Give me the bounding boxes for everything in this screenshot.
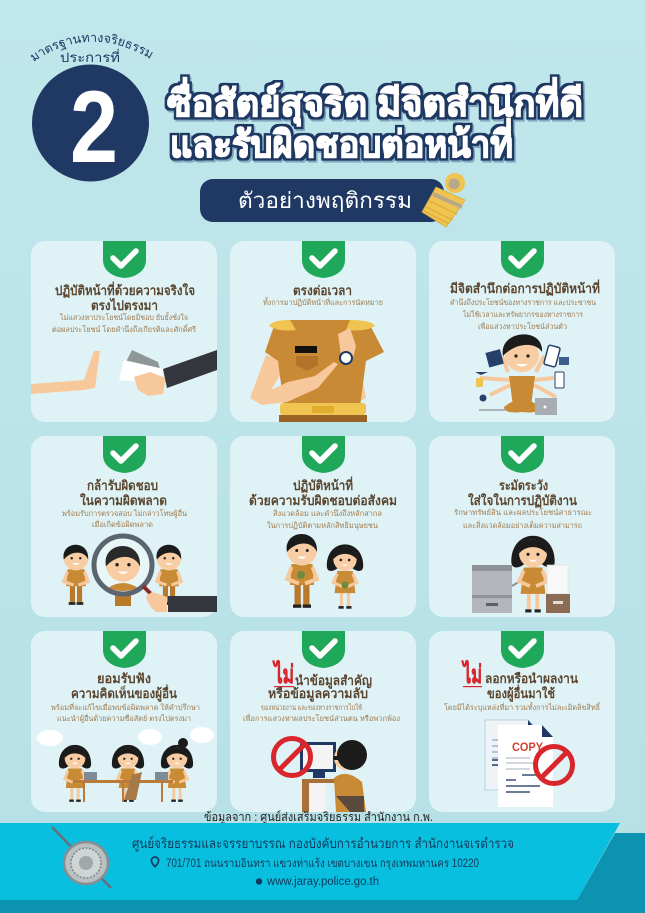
panel: confidential data: [230, 631, 416, 812]
description: รักษาทรัพย์สิน และผลประโยชน์สาธารณะ: [454, 508, 592, 517]
main title: ซื่อสัตย์สุจริต มีจิตสำนึกที่ดี: [167, 77, 583, 127]
description line 2: แนะนำผู้อื่นด้วยความซื่อสัตย์ ตรงไปตรงมา: [57, 713, 191, 723]
icon: check shield: [501, 436, 544, 473]
footer dark band: [0, 833, 645, 913]
illustration: magnifier on officers: [63, 536, 217, 612]
footer band: [0, 823, 620, 900]
description line 2: ต่อผลประโยชน์ โดยคำนึงถึงเกียรติและศักดิ์ศรี: [52, 324, 196, 334]
illustration: officer at secret screen: [274, 738, 367, 812]
icon: check shield: [302, 436, 345, 473]
panel: conscience: [429, 241, 615, 422]
heading line 2: ความคิดเห็นของผู้อื่น: [71, 684, 177, 702]
illustration: two officers with plant: [287, 534, 363, 609]
description line 2: และสิ่งแวดล้อมอย่างเต็มความสามารถ: [463, 520, 582, 530]
illustration: copied documents: COPY: [512, 740, 543, 754]
description: โดยมิได้ระบุแหล่งที่มา รวมทั้งการไม่ละเมิดลิขสิทธิ์: [444, 702, 601, 712]
panel: accept mistakes: [31, 436, 217, 617]
icon: check shield: [103, 241, 146, 278]
heading: ลอกหรือนำผลงาน: [485, 671, 578, 686]
illustration: meeting at table: [37, 727, 214, 802]
heading line 2: ด้วยความรับผิดชอบต่อสังคม: [249, 493, 397, 508]
description: คำนึงถึงประโยชน์ของทางราชการ และประชาชน: [450, 298, 596, 307]
description: ของหน่วยงาน และของทางราชการไปใช้: [261, 703, 362, 712]
heading line 2: ของผู้อื่นมาใช้: [487, 684, 555, 702]
illustration: officer checking watch: [250, 320, 384, 422]
description: ทั้งการมาปฏิบัติหน้าที่และการนัดหมาย: [263, 297, 383, 307]
description line 2: เมื่อเกิดข้อผิดพลาด: [92, 519, 153, 529]
police emblem: [52, 827, 111, 888]
description: พร้อมที่จะแก้ไขเมื่อพบข้อผิดพลาด ให้คำปรึกษา: [51, 702, 200, 712]
curved caption: มาตรฐานทางจริยธรรม: [30, 34, 153, 61]
red underline: [463, 686, 482, 687]
description: พร้อมรับการตรวจสอบ ไม่กล่าวโทษผู้อื่น: [62, 508, 187, 518]
heading line 2: ตรงไปตรงมา: [91, 297, 158, 313]
illustration: officer at printer: [472, 536, 570, 613]
icon: gold epaulette: [422, 173, 465, 227]
red negative word: ไม่: [272, 659, 294, 689]
icon: check shield: [103, 631, 146, 668]
panel: punctual: [230, 241, 416, 422]
main title: และรับผิดชอบต่อหน้าที่: [170, 118, 513, 165]
heading line 2: หรือข้อมูลความลับ: [268, 686, 368, 702]
number circle: [32, 64, 149, 182]
heading: นำข้อมูลสำคัญ: [295, 673, 372, 689]
subtitle pill: [200, 179, 444, 222]
caption second line: ประการที่: [60, 49, 120, 65]
source note: ข้อมูลจาก : ศูนย์ส่งเสริมจริยธรรม สำนักงาน ก.พ.: [204, 810, 433, 825]
description line 2: ในการปฏิบัติตามหลักสิทธิมนุษยชน: [267, 521, 378, 530]
description: สิ่งแวดล้อม และคำนึงถึงหลักสากล: [273, 508, 382, 518]
illustration: copied documents: [485, 720, 572, 807]
number 2: 2: [70, 70, 118, 184]
panel: social responsibility: [230, 436, 416, 617]
icon: check shield: [302, 241, 345, 278]
heading: ระมัดระวัง: [499, 478, 548, 493]
subtitle pill: ตัวอย่างพฤติกรรม: [238, 188, 412, 213]
heading: มีจิตสำนึกต่อการปฏิบัติหน้าที่: [450, 279, 600, 297]
red negative word: ไม่: [461, 659, 482, 689]
description: ไม่แสวงหาประโยชน์โดยมิชอบ ยับยั้งชั่งใจ: [59, 312, 188, 322]
website: www.jaray.police.go.th: [266, 876, 379, 888]
illustration: multitasking officer: [475, 334, 569, 415]
panel: listen to others: [31, 631, 217, 812]
icon: globe: [256, 878, 262, 885]
heading: ยอมรับฟัง: [97, 671, 151, 686]
description line 2: ไม่ใช้เวลาและทรัพยากรของทางราชการ: [462, 310, 583, 319]
heading line 2: ในความผิดพลาด: [80, 492, 167, 508]
heading: กล้ารับผิดชอบ: [87, 478, 158, 493]
heading line 2: ใส่ใจในการปฏิบัติงาน: [468, 492, 577, 509]
icon: check shield: [103, 436, 146, 473]
address: 701/701 ถนนรามอินทรา แขวงท่าแร้ง เขตบางเขน กรุงเทพมหานคร 10220: [166, 857, 479, 870]
icon: check shield: [501, 631, 544, 668]
main title: [167, 77, 583, 165]
panel: no plagiarism: [429, 631, 615, 812]
heading: ปฏิบัติหน้าที่: [293, 476, 353, 494]
icon: map pin: [151, 857, 159, 867]
red underline: [274, 686, 294, 687]
icon: check shield: [302, 631, 345, 668]
description line 3: เพื่อแสวงหาประโยชน์ส่วนตัว: [478, 321, 567, 331]
panel: honest duty: [31, 241, 217, 422]
heading: ตรงต่อเวลา: [293, 283, 352, 298]
panel: careful at work: [429, 436, 615, 617]
description line 2: เพื่อการแสวงหาผลประโยชน์ส่วนตน หรือพวกพ้อง: [243, 713, 400, 723]
heading: ปฏิบัติหน้าที่ด้วยความจริงใจ: [55, 281, 195, 299]
icon: check shield: [501, 241, 544, 278]
organisation name: ศูนย์จริยธรรมและจรรยาบรรณ กองบังคับการอำนวยการ สำนักงานจเรตำรวจ: [132, 835, 514, 852]
standard number badge: [30, 34, 153, 184]
illustration: refusing a bribe: [31, 350, 217, 396]
